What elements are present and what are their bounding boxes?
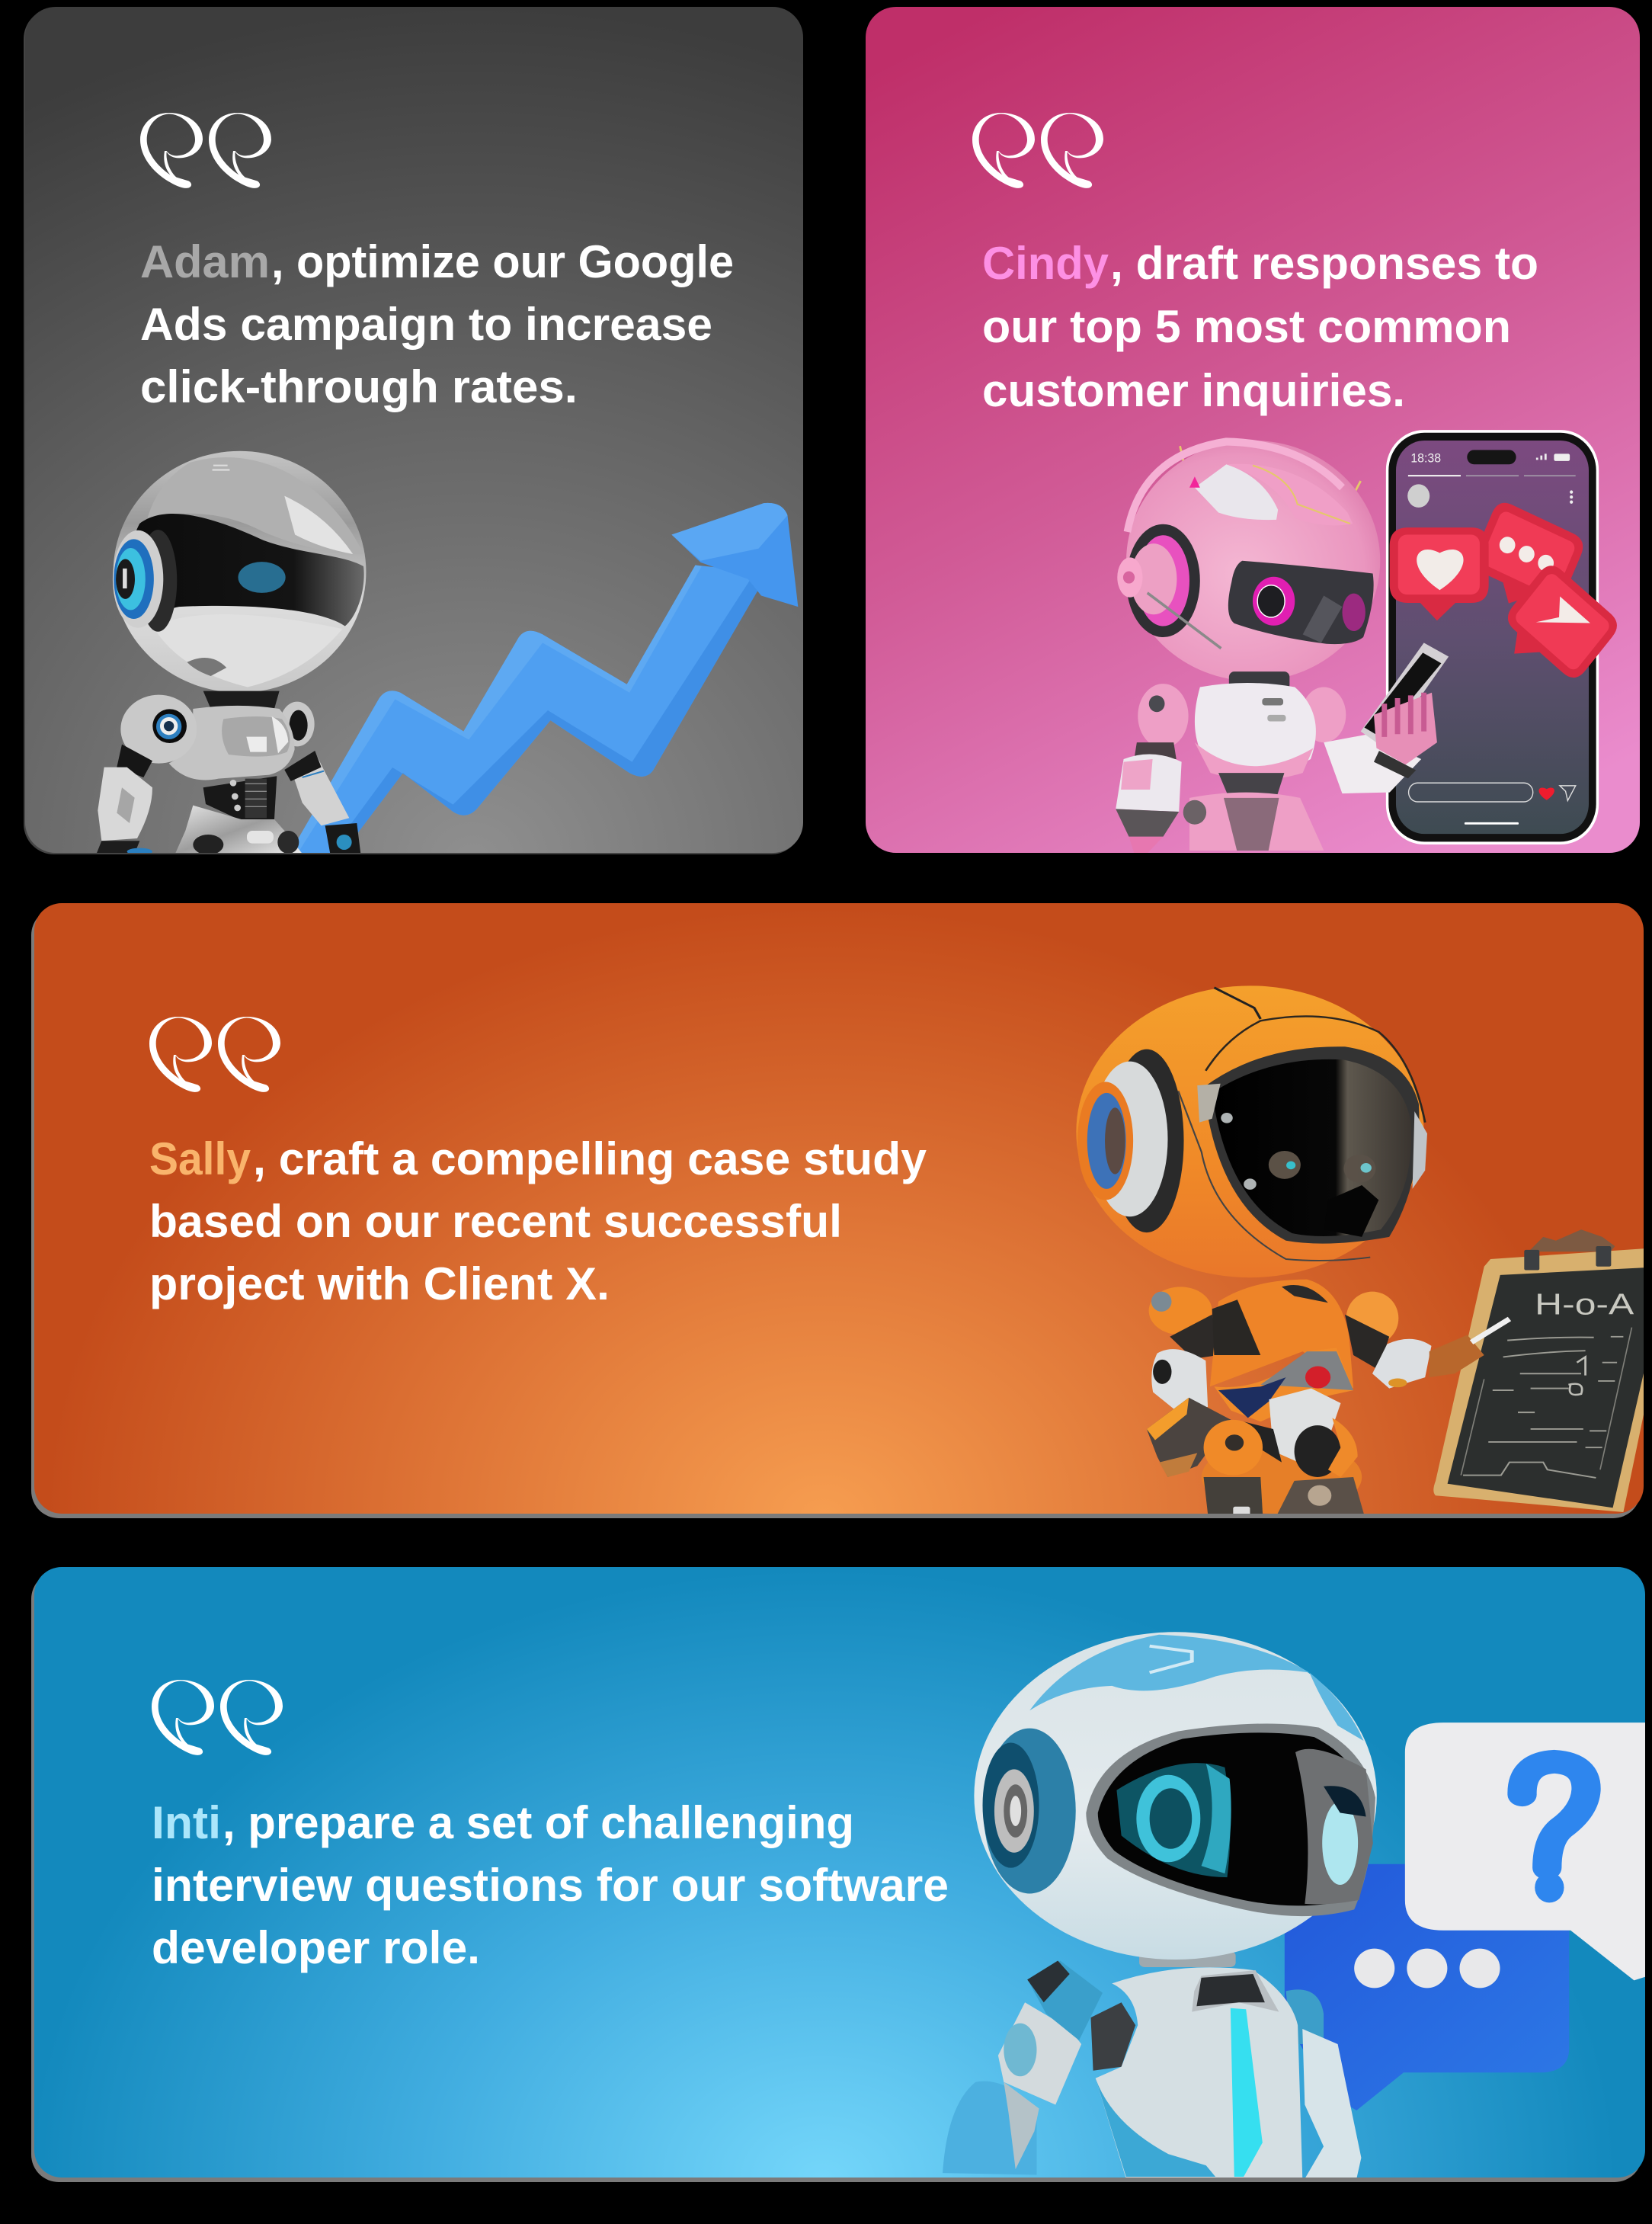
icon: heart bubble	[1390, 527, 1489, 620]
icon: smartphone	[1386, 430, 1599, 844]
card background	[25, 7, 803, 853]
panel: Cindy	[866, 7, 1640, 854]
text block: Adam prompt: Ads campaign to increase	[140, 299, 712, 350]
quote mark icon	[152, 1680, 283, 1755]
quote mark icon	[140, 113, 271, 188]
icon: smartphone: 18:38	[1410, 451, 1441, 465]
card background	[34, 903, 1644, 1514]
text block: Adam prompt: , optimize our Google	[271, 236, 734, 287]
icon: chat bubble	[1463, 498, 1587, 623]
text block: Sally prompt: , craft a compelling case study	[253, 1133, 927, 1184]
robot: silver body	[97, 691, 360, 855]
icon: blue rising arrow	[290, 503, 798, 854]
icon: send bubble	[1491, 560, 1622, 697]
text block: Inti prompt: , prepare a set of challenging	[223, 1797, 854, 1848]
text block: Inti prompt: interview questions for our software	[152, 1860, 949, 1911]
text block: Sally prompt: project with Client X.	[149, 1258, 610, 1309]
text block: Sally prompt: based on our recent successful	[149, 1196, 842, 1247]
text block: Adam prompt: click-through rates.	[140, 361, 578, 412]
text block: Inti prompt	[152, 1797, 949, 1973]
text block: Sally prompt	[149, 1133, 927, 1309]
icon: chalkboard	[1433, 1229, 1652, 1512]
text block: Adam prompt: Adam	[140, 236, 270, 287]
text block: Adam prompt	[140, 236, 734, 412]
robot: pink	[1116, 441, 1449, 854]
robot: orange	[1076, 985, 1510, 1516]
text block: Inti prompt: Inti	[152, 1797, 221, 1848]
text block: Cindy prompt: Cindy	[982, 238, 1109, 289]
quote mark icon	[149, 1017, 280, 1092]
text block: Cindy prompt: our top 5 most common	[982, 301, 1511, 352]
icon: question bubble	[1405, 1722, 1648, 1980]
icon: blue chat bubble	[1285, 1864, 1569, 2110]
text block: Sally prompt: Sally	[149, 1133, 251, 1184]
text block: Cindy prompt: , draft responses to	[1110, 238, 1538, 289]
text block: Cindy prompt: customer inquiries.	[982, 365, 1405, 416]
robot: silver head	[113, 451, 366, 693]
icon: chalkboard: H-o-A	[1535, 1287, 1634, 1321]
card background	[34, 1567, 1645, 2178]
text block: Inti prompt: developer role.	[152, 1922, 480, 1973]
panel: Sally	[31, 903, 1652, 1518]
robot: blue and white	[943, 1632, 1377, 2179]
panel: Adam	[24, 7, 803, 855]
card background	[866, 7, 1640, 853]
text block: Cindy prompt	[982, 238, 1538, 416]
panel: Inti	[31, 1567, 1648, 2182]
quote mark icon	[972, 113, 1103, 188]
